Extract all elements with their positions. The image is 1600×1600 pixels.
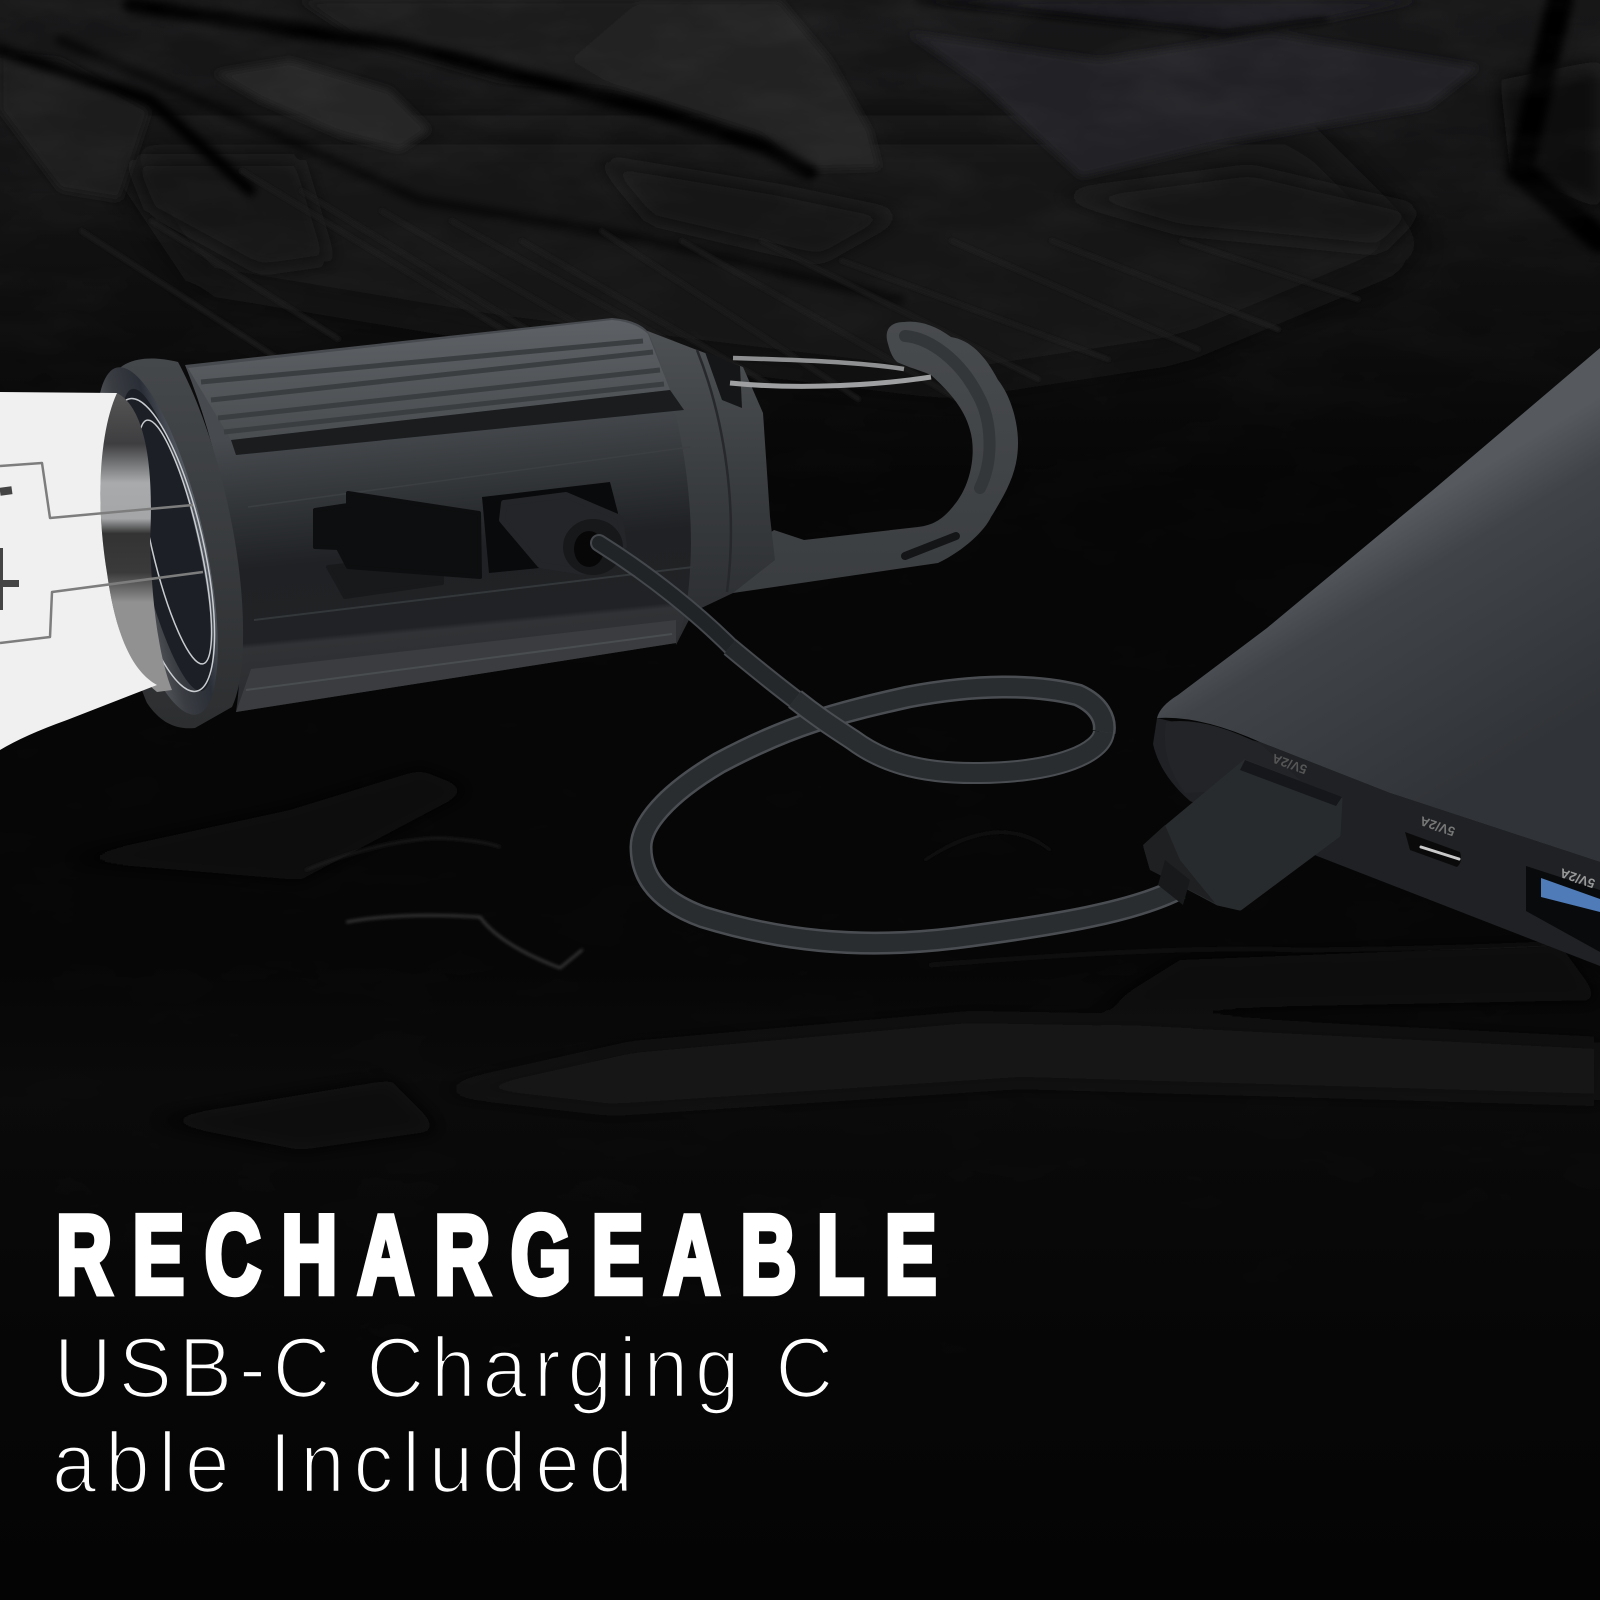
port: USB-A: 5V/2A xyxy=(1557,865,1597,891)
lantern: glass disc xyxy=(71,357,243,725)
USB-C plug in lantern xyxy=(502,495,624,575)
port cover flap xyxy=(315,493,480,597)
charging port recess xyxy=(482,482,620,573)
USB plug into power bank: 5V/2A xyxy=(1269,751,1309,777)
lantern: bottom ribs xyxy=(236,620,676,712)
subtitle line 2: able Included xyxy=(52,1416,633,1511)
lantern: front collar xyxy=(108,358,243,728)
port: USB-C xyxy=(1405,813,1461,867)
power bank xyxy=(1143,348,1600,966)
lantern: hook xyxy=(720,322,1018,593)
lantern: dark groove xyxy=(231,390,684,455)
power bank: side face xyxy=(1153,718,1600,966)
background: dark rock texture xyxy=(0,0,1600,1149)
lantern: rear collar xyxy=(645,330,775,645)
heading: RECHARGEABLE xyxy=(56,1193,937,1317)
cable: lower strand xyxy=(641,687,1180,943)
lantern: rear collar edge xyxy=(697,350,731,592)
cable: upper strand xyxy=(599,543,1104,773)
lantern: body xyxy=(185,318,693,712)
power bank: end cap xyxy=(1165,721,1300,793)
lantern: top ribs xyxy=(188,320,670,440)
power bank: top face xyxy=(1157,348,1600,862)
lantern: wire handle back xyxy=(733,358,904,369)
port: USB-C: 5V/2A xyxy=(1417,813,1457,839)
lantern: wire handle front xyxy=(730,377,931,386)
lantern xyxy=(0,318,1018,750)
lantern: white bulb xyxy=(0,392,157,750)
lantern: glass neck xyxy=(100,393,172,692)
port: USB-A xyxy=(1526,865,1600,952)
lantern: filament wires xyxy=(0,463,203,643)
lantern: black marks in bulb xyxy=(0,486,19,610)
lantern: rear bracket xyxy=(705,352,742,408)
USB plug into power bank xyxy=(1143,751,1342,908)
subtitle line 1: USB-C Charging C xyxy=(54,1321,833,1416)
